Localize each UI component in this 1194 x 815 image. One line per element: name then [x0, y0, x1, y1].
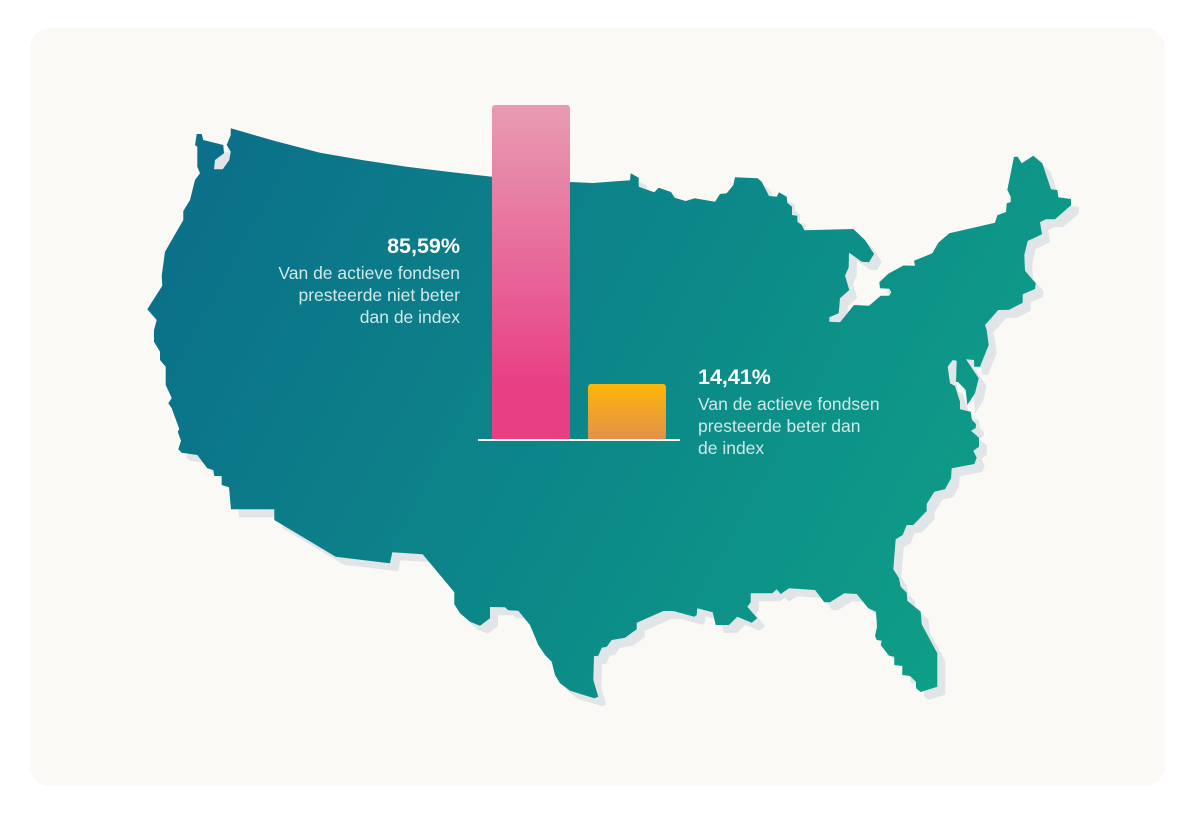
text block: 14,41%: [698, 365, 880, 458]
bar chart: [478, 105, 680, 441]
description: beter: presteerde beter dan: [698, 416, 860, 436]
description: beter: de index: [698, 438, 764, 458]
map shadow: [155, 136, 1079, 706]
description: niet beter: [278, 263, 460, 327]
description: niet beter: Van de actieve fondsen: [278, 263, 460, 283]
bar: beter dan de index 14,41%: [588, 384, 666, 440]
description: niet beter: presteerde niet beter: [298, 285, 460, 305]
description: beter: [698, 394, 880, 458]
value: 14,41%: 14,41%: [698, 365, 771, 389]
value: 85,59%: 85,59%: [387, 234, 460, 258]
description: beter: Van de actieve fondsen: [698, 394, 880, 414]
map shape: [147, 128, 1071, 698]
description: niet beter: dan de index: [360, 307, 460, 327]
text block: 85,59%: [278, 234, 460, 327]
bar: niet beter dan de index 85,59%: [492, 105, 570, 440]
chart baseline: [478, 439, 680, 441]
map of the United States: [147, 128, 1079, 706]
